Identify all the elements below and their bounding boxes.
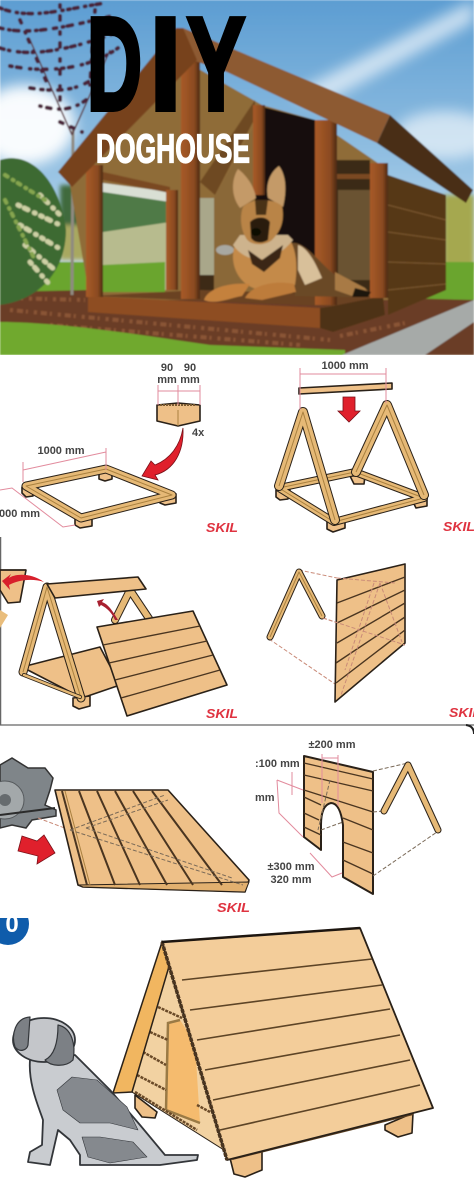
wood block bbox=[157, 403, 200, 426]
frame feet bbox=[22, 472, 176, 528]
base frame beams bbox=[26, 469, 172, 518]
panel: step 6 cut door opening bbox=[255, 739, 438, 894]
panel: step 5 saw roof board bbox=[0, 758, 250, 915]
frame line: panel divider bbox=[0, 724, 474, 726]
under-roof batten bbox=[232, 1113, 413, 1158]
wall battens bbox=[135, 1007, 210, 1130]
depth dimension bbox=[0, 488, 75, 527]
rear A-frame bbox=[356, 405, 424, 495]
bush bbox=[0, 158, 66, 305]
rear foot bbox=[135, 1095, 157, 1118]
cross beam bbox=[103, 172, 170, 193]
front wall bbox=[132, 958, 224, 1150]
gable underside bbox=[70, 60, 388, 300]
tree foliage bbox=[0, 3, 118, 295]
foot bbox=[73, 696, 90, 709]
dashed guides bbox=[318, 763, 437, 876]
dog head bbox=[13, 1018, 75, 1062]
chest bbox=[233, 240, 296, 290]
quantity label: 4x bbox=[192, 427, 205, 439]
dog bbox=[13, 1017, 198, 1165]
dog ears bbox=[14, 1017, 30, 1050]
ridge board bbox=[47, 577, 146, 598]
German shepherd bbox=[204, 166, 371, 302]
opening dimensions: mm bbox=[255, 792, 275, 804]
frame line: left edge bbox=[0, 537, 2, 725]
posts bbox=[86, 165, 103, 297]
door bbox=[166, 1020, 200, 1123]
red arrow bbox=[18, 835, 55, 864]
block dimensions: 90 bbox=[184, 362, 196, 374]
title: DOGHOUSE: DOGHOUSE bbox=[96, 126, 250, 172]
side doorway bbox=[337, 160, 370, 295]
frame corner bbox=[466, 725, 474, 734]
opening dimensions: ±200 mm bbox=[308, 739, 356, 751]
SKIL logo: SKIL bbox=[206, 706, 238, 721]
block dimensions bbox=[157, 362, 200, 405]
front foot bbox=[230, 1150, 262, 1177]
ridge board bbox=[299, 383, 392, 394]
dog body bbox=[28, 1055, 198, 1165]
opening dimensions: ±300 mm bbox=[267, 861, 315, 873]
front A-frame bbox=[23, 587, 81, 698]
ears bbox=[233, 169, 256, 208]
panel: hero photo of wooden doghouse bbox=[0, 0, 474, 355]
block dimensions: mm bbox=[157, 374, 177, 386]
ridge dimension: 1000 mm bbox=[321, 360, 369, 372]
title: DIY bbox=[87, 0, 245, 138]
opening dimensions: 320 mm bbox=[271, 874, 312, 886]
head bbox=[241, 200, 283, 244]
roof bbox=[162, 928, 433, 1160]
dog saddle bbox=[57, 1077, 138, 1130]
block dimensions: 90 bbox=[161, 362, 173, 374]
gable board bbox=[323, 564, 405, 702]
open view through porch bbox=[102, 192, 166, 232]
step badge bbox=[0, 918, 29, 945]
small red arrow bbox=[97, 599, 118, 620]
deck front bbox=[88, 296, 320, 328]
red down arrow bbox=[338, 397, 360, 422]
red curved arrow bbox=[142, 428, 183, 480]
doghouse bbox=[58, 28, 473, 332]
front grass bbox=[0, 322, 345, 355]
width dimension: 1000 mm bbox=[37, 445, 85, 457]
cut guide bbox=[38, 818, 70, 830]
door board bbox=[304, 756, 373, 894]
opening dimensions bbox=[255, 739, 356, 886]
sky bbox=[0, 0, 474, 270]
board bbox=[55, 790, 249, 892]
roof panel bbox=[97, 611, 227, 716]
front A-frame bbox=[279, 412, 335, 520]
clouds bbox=[0, 0, 474, 165]
right foot bbox=[385, 1113, 413, 1137]
main roof right slope bbox=[183, 28, 390, 143]
dashed guides bbox=[269, 570, 405, 684]
main roof left slope bbox=[58, 28, 197, 187]
body bbox=[290, 243, 370, 297]
opening dimensions: :100 mm bbox=[255, 758, 300, 770]
deck top bbox=[102, 290, 371, 301]
lawn bbox=[36, 261, 474, 301]
SKIL logo: SKIL bbox=[206, 520, 238, 535]
panel: step 4 attach gable board bbox=[269, 564, 474, 720]
width dimension bbox=[23, 445, 106, 482]
side roof bbox=[377, 115, 473, 203]
dog haunch bbox=[82, 1137, 147, 1163]
block dimensions: mm bbox=[180, 374, 200, 386]
ridge dimension bbox=[300, 360, 386, 410]
A-frame bbox=[384, 765, 438, 830]
SKIL logo: SKIL bbox=[217, 900, 250, 915]
circular saw bbox=[0, 758, 56, 828]
panel: step 2 A-frames bbox=[276, 360, 474, 534]
dark interior bbox=[255, 105, 315, 295]
base frame bbox=[279, 472, 424, 522]
rear A-frame bbox=[115, 590, 150, 620]
panel: step 3 fit roof panel bbox=[0, 570, 238, 721]
muzzle bbox=[250, 218, 270, 242]
mulch bed bbox=[0, 290, 474, 355]
panel: step 1 base frame bbox=[0, 362, 238, 535]
background trees bbox=[60, 185, 474, 270]
side wall bbox=[388, 175, 446, 315]
side overhang bbox=[113, 942, 170, 1093]
front paws bbox=[204, 284, 250, 302]
panel: finished A-frame doghouse with dog bbox=[13, 928, 433, 1177]
depth dimension: 000 mm bbox=[0, 508, 40, 520]
water bowl bbox=[216, 245, 234, 255]
cropped detail bbox=[0, 570, 44, 628]
SKIL logo: SKIL bbox=[443, 519, 474, 534]
A-frame bbox=[270, 572, 322, 637]
step badge: 0 bbox=[5, 911, 19, 938]
feet bbox=[276, 476, 427, 532]
stone path bbox=[342, 300, 474, 355]
floor bbox=[22, 647, 120, 698]
